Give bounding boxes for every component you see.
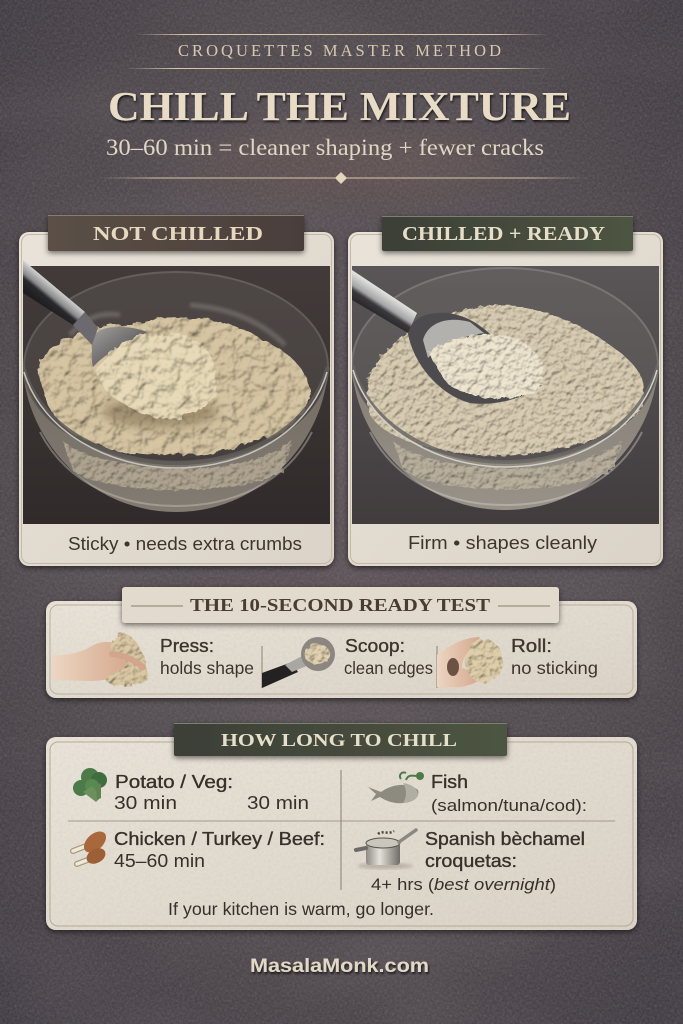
step: scoop [344,636,433,678]
icon: hand rolling dough [437,637,503,687]
header block [98,34,588,184]
icon: fish [368,772,424,803]
note: warm kitchen: If your kitchen is warm, go longer. [168,899,434,919]
step: roll: Roll: [511,636,552,656]
panel: 10-second ready test [46,587,637,698]
row: potato and veg: 30 min [114,793,177,813]
title: CHILL THE MIXTURE [108,83,571,129]
step: roll [511,636,598,678]
step: scoop: clean edges [344,658,433,678]
tag: not chilled: NOT CHILLED [93,223,263,245]
row: fish: Fish [431,772,468,792]
row: potato and veg [114,772,309,813]
tag: not chilled [48,215,304,251]
icon: saucepan [356,830,416,869]
row: potato and veg: 30 min [247,793,309,813]
icon: ice cream scoop [262,637,335,688]
heading tab [122,587,559,623]
row: fish: (salmon/tuna/cod): [431,797,587,815]
row: spanish bechamel croquetas: 4+ hrs ( best overnight ) [371,875,556,894]
scoop bowl [408,313,542,404]
caption: sticky: Sticky • needs extra crumbs [68,533,302,554]
icon: hand pressing dough [52,633,148,686]
tag: chilled and ready [382,216,633,251]
row: chicken turkey beef: 45–60 min [114,851,205,871]
step: press: Press: [160,636,214,656]
heading tab [174,723,507,756]
diamond ornament [335,172,347,184]
panel: chilled and ready [348,232,663,566]
row: chicken turkey beef [114,829,325,871]
caption: firm: Firm • shapes cleanly [408,532,598,553]
row: spanish bechamel croquetas: Spanish bèchamel [425,829,585,849]
heading tab: THE 10-SECOND READY TEST [190,595,490,615]
row: spanish bechamel croquetas: croquetas: [425,851,517,871]
heading tab: HOW LONG TO CHILL [221,730,457,750]
tag: chilled and ready: CHILLED + READY [402,223,606,245]
spoon handle [23,260,98,345]
icon: chicken drumsticks [73,827,110,867]
photo: firm mixture in bowl [352,266,659,524]
row: fish [431,772,587,815]
step: press [160,636,254,678]
step: press: holds shape [160,658,254,678]
row: chicken turkey beef: Chicken / Turkey / Beef: [114,829,325,849]
panel: not chilled [19,232,334,566]
step: scoop: Scoop: [345,636,405,656]
scoop handle [352,270,417,333]
step: roll: no sticking [511,658,598,678]
row: potato and veg: Potato / Veg: [115,772,233,792]
row: spanish bechamel croquetas [371,829,585,894]
eyebrow: croquettes master method: CROQUETTES MASTER METHOD [178,41,501,60]
subtitle: 30–60 min = cleaner shaping + fewer cracks [106,135,544,160]
mound shadow [102,396,218,428]
icon: broccoli [73,768,107,802]
panel: how long to chill [46,723,637,930]
footer: website: MasalaMonk.com [250,956,429,977]
photo: sticky mixture in bowl [23,266,330,524]
